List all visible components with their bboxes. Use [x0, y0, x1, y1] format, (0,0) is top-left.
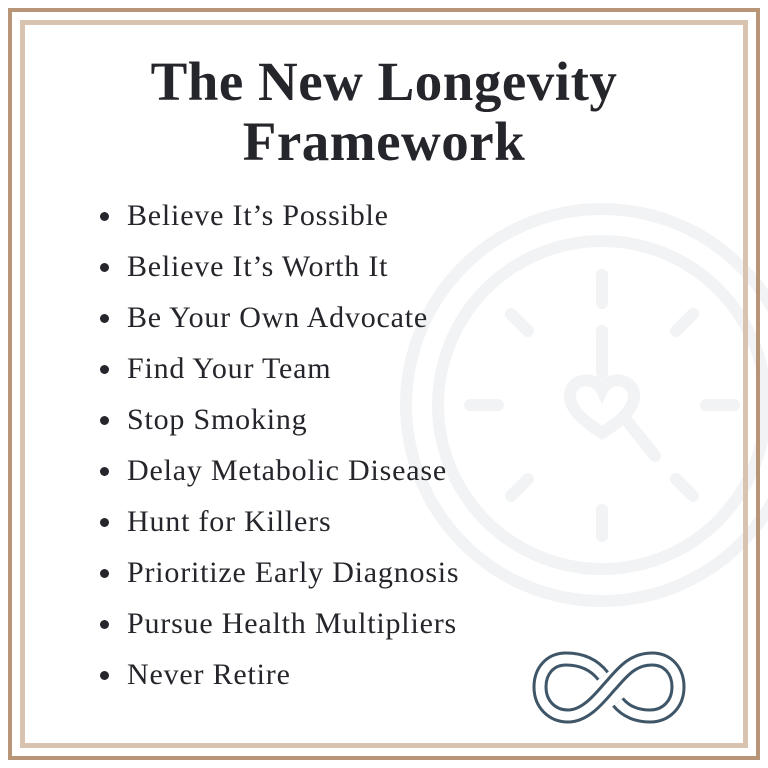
- title: [151, 51, 617, 172]
- list: Hunt for Killers: [127, 505, 331, 538]
- icon: infinity logo: [532, 652, 686, 724]
- list: Stop Smoking: [127, 403, 307, 436]
- list: Delay Metabolic Disease: [127, 454, 447, 487]
- list: Prioritize Early Diagnosis: [127, 556, 459, 589]
- list: Find Your Team: [127, 352, 331, 385]
- list: Never Retire: [127, 658, 291, 691]
- list: Believe It’s Possible: [127, 199, 389, 232]
- list: Believe It’s Worth It: [127, 250, 388, 283]
- list: Be Your Own Advocate: [127, 301, 428, 334]
- list: Pursue Health Multipliers: [127, 607, 457, 640]
- list: [100, 199, 459, 691]
- title: Framework: [243, 111, 525, 172]
- title: The New Longevity: [151, 51, 617, 112]
